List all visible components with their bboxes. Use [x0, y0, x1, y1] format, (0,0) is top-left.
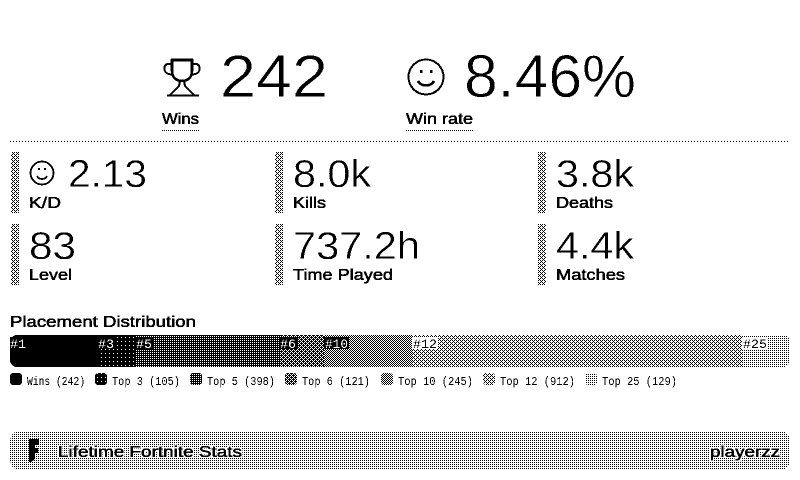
value: 737.2h [293, 225, 420, 268]
icon: small smiley [30, 162, 54, 184]
label: wins: Wins [162, 111, 199, 128]
legend item: top 12: Top 12 (912) [500, 376, 575, 389]
label: Time Played [293, 267, 393, 284]
stat card: time played [275, 224, 420, 285]
icon: trophy [164, 60, 200, 96]
marker bar [275, 224, 283, 285]
legend item: top 25: Top 25 (129) [602, 376, 677, 389]
stat card: deaths [538, 152, 635, 213]
stat card: level [11, 224, 76, 285]
footer title: Lifetime Fortnite Stats [58, 444, 242, 461]
legend item: top 5: Top 5 (398) [207, 376, 275, 389]
label: Matches [556, 267, 625, 284]
value: 2.13 [68, 153, 147, 196]
value: 242: 242 [220, 43, 328, 110]
icon: smiley [408, 60, 444, 94]
legend item: top 25 [585, 373, 677, 389]
legend [10, 373, 677, 389]
bar label #3: #3 [98, 337, 114, 352]
legend item: top 6: Top 6 (121) [302, 376, 370, 389]
footer username: playerzz [710, 444, 780, 461]
legend item: top 3: Top 3 (105) [112, 376, 180, 389]
marker bar [11, 224, 19, 285]
legend item: top 12 [483, 373, 575, 389]
value: 8.0k [293, 153, 372, 196]
marker bar [11, 152, 19, 213]
legend item: top 5 [190, 373, 275, 389]
stacked bar chart: placement distribution [10, 335, 790, 367]
bar label #10: #10 [325, 337, 348, 352]
stat card: K/D [11, 152, 147, 213]
stat card: kills [275, 152, 372, 213]
footer banner [10, 431, 790, 470]
headline stat: wins [162, 43, 328, 128]
marker bar [538, 152, 546, 213]
legend item: wins: Wins (242) [27, 376, 85, 389]
heading: placement distribution: Placement Distribution [10, 314, 196, 331]
label: K/D [29, 195, 61, 212]
label: Deaths [556, 195, 613, 212]
bar label #6: #6 [280, 337, 296, 352]
label: win rate: Win rate [406, 111, 473, 128]
stat card: matches [538, 224, 635, 285]
bar label #25: #25 [743, 337, 767, 352]
legend item: top 6 [285, 373, 370, 389]
bar label #1: #1 [10, 337, 26, 352]
legend item: top 10 [381, 373, 473, 389]
bar label #5: #5 [136, 337, 152, 352]
value: 4.4k [556, 225, 635, 268]
marker bar [275, 152, 283, 213]
icon: F logo [29, 439, 39, 462]
bar label #12: #12 [413, 337, 437, 352]
value: 83 [29, 225, 76, 268]
label: Level [29, 267, 72, 284]
legend item: top 10: Top 10 (245) [398, 376, 473, 389]
marker bar [538, 224, 546, 285]
legend item: top 3 [95, 373, 180, 389]
legend item: wins [10, 373, 85, 389]
label: Kills [293, 195, 326, 212]
headline stat: win rate [406, 43, 636, 128]
value: 3.8k [556, 153, 635, 196]
value: 8.46%: 8.46% [464, 43, 636, 110]
